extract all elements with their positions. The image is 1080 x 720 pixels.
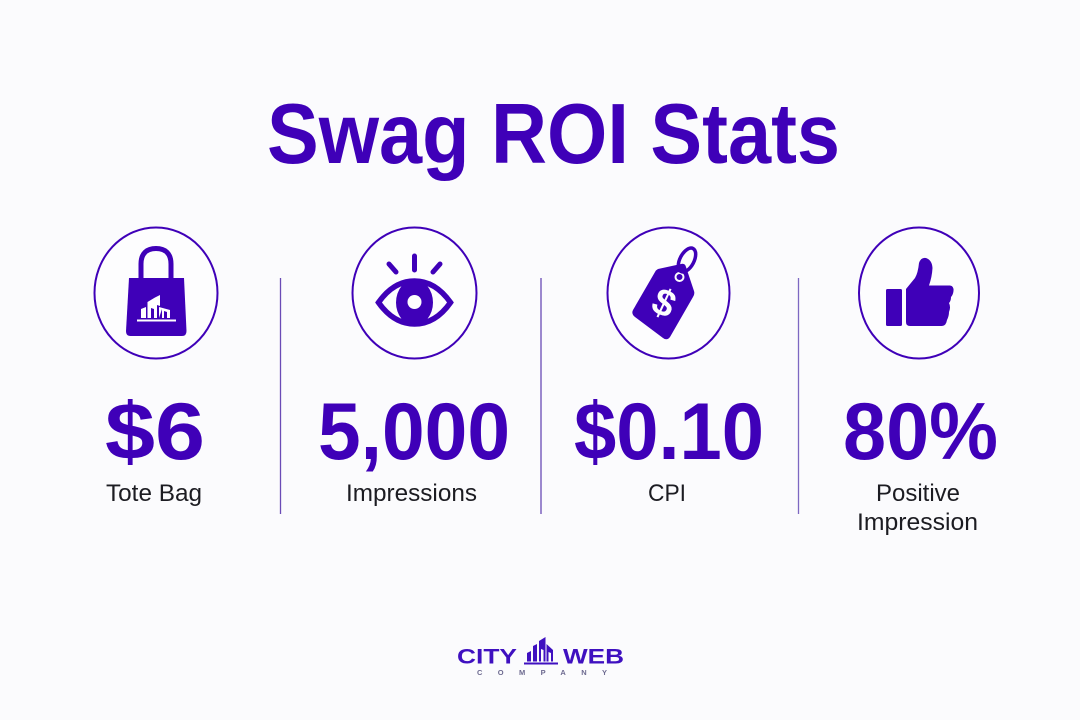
- stat: 80%: 80%: [843, 387, 998, 477]
- icon: tote bag: [94, 228, 218, 358]
- logo wordmark: Web: WEB: [563, 644, 624, 668]
- stat: 5,000: 5,000: [318, 387, 510, 477]
- title: Swag ROI Stats: [267, 87, 840, 182]
- label: Tote Bag: Tote Bag: [106, 480, 202, 507]
- icon: thumbs up: [859, 228, 979, 358]
- icon: eye: [352, 228, 476, 358]
- label: Positive Impression: Impression: [857, 509, 978, 536]
- logo wordmark: City: CITY: [457, 644, 517, 668]
- label: Impressions: Impressions: [346, 480, 477, 507]
- divider 2: [540, 278, 542, 514]
- column: positive impression: [843, 228, 998, 536]
- label: CPI: CPI: [648, 480, 686, 507]
- logo icon: skyline: [524, 637, 558, 664]
- column: tote bag: [94, 228, 218, 507]
- logo: City Web Company: [457, 637, 624, 677]
- stat: $0.10: $0.10: [574, 387, 764, 477]
- divider 1: [280, 278, 282, 514]
- column: CPI: [574, 228, 764, 507]
- stat: $6: $6: [105, 387, 205, 477]
- label: Positive Impression: Positive: [876, 480, 960, 507]
- logo tagline: Company: COMPANY: [477, 668, 607, 677]
- icon: price tag: [608, 228, 730, 358]
- label: Positive Impression: [857, 480, 978, 536]
- column: impressions: [318, 228, 510, 507]
- icon: price tag: $: [645, 280, 682, 327]
- divider 3: [798, 278, 800, 514]
